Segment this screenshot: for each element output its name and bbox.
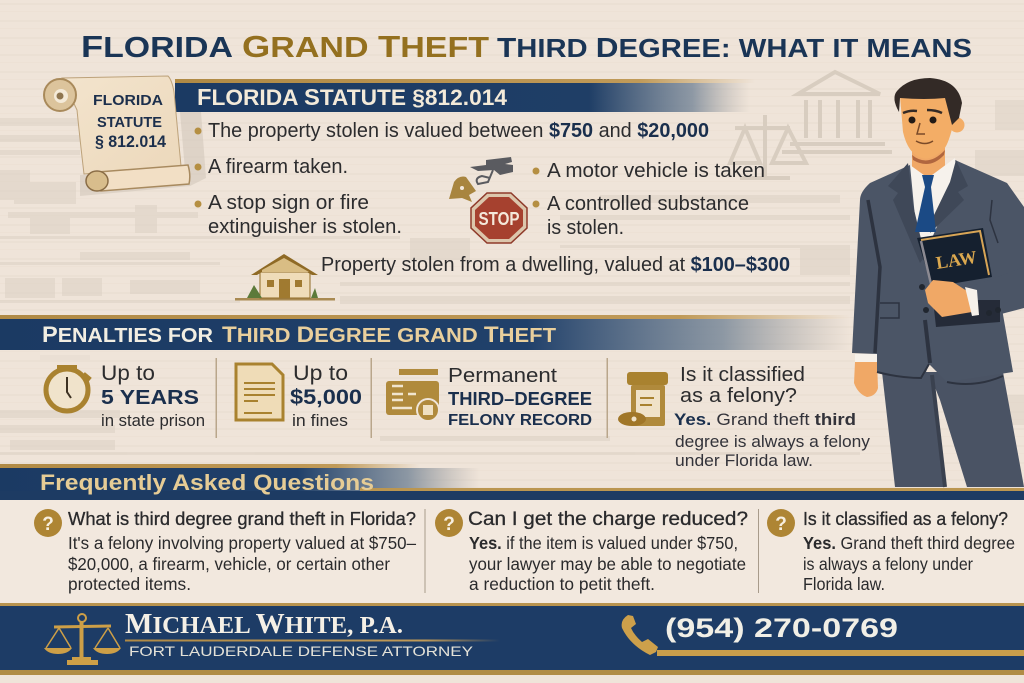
- title: THIRD DEGREE: WHAT IT MEANS: [497, 32, 972, 63]
- faq item 3: Florida law.: [803, 574, 885, 594]
- forearm: [970, 267, 1024, 320]
- footer: (954) 270-0769: [665, 613, 898, 643]
- text block: statute bullets: A firearm taken.: [208, 156, 348, 178]
- icon: stop sign: [471, 193, 527, 243]
- title: FLORIDA: [81, 29, 233, 64]
- panel: felony classification: degree is always a felony: [675, 432, 871, 451]
- text block: statute bullets: is stolen.: [547, 217, 624, 239]
- trousers: [882, 372, 1024, 487]
- panel: statute header band: [175, 79, 755, 112]
- icon: stopwatch: [46, 365, 92, 411]
- panel: statute header band: FLORIDA STATUTE §812.014: [197, 84, 508, 110]
- panel: faq header band: Frequently Asked Questions: [40, 470, 374, 495]
- panel: penalties header band: [0, 315, 850, 350]
- book lower shadow: [933, 300, 1000, 327]
- panel: felony classification: as a felony?: [680, 385, 797, 407]
- icon: scales of justice: [44, 614, 121, 665]
- faq item 2: Yes. if the item is valued under $750,: [469, 533, 738, 553]
- panel: faq body: [0, 500, 1024, 603]
- panel: 5 years penalty: Up to: [101, 362, 155, 385]
- text block: statute bullets: A motor vehicle is taken: [547, 160, 765, 182]
- panel: felony classification: Yes. Grand theft third: [674, 410, 856, 429]
- illustration: attorney holding law book: LAW: [934, 247, 978, 273]
- panel: felony record penalty: Permanent: [448, 365, 557, 387]
- icon: record card: [386, 369, 439, 421]
- faq item 1: [34, 509, 416, 594]
- icon: question 2: [435, 509, 463, 537]
- panel: penalties header band: PENALTIES FOR: [42, 322, 214, 347]
- panel: felony classification: [618, 364, 871, 470]
- faq item 1: protected items.: [68, 574, 191, 594]
- footer: [0, 603, 1024, 675]
- text block: statute bullets: [194, 120, 790, 276]
- faq item 2: Can I get the charge reduced?: [468, 509, 748, 530]
- icon: document: [236, 364, 283, 420]
- panel: 5 years penalty: in state prison: [101, 411, 205, 430]
- text block: statute bullets: A controlled substance: [547, 193, 749, 215]
- icon: telephone: [622, 615, 658, 655]
- illustration: attorney holding law book: [852, 78, 1024, 487]
- panel: felony record penalty: FELONY RECORD: [448, 412, 592, 429]
- faq item 2: your lawyer may be able to negotiate: [469, 554, 746, 574]
- title: [81, 29, 972, 64]
- icon: scroll with statute: [44, 76, 206, 196]
- book: [917, 228, 992, 287]
- sliver between body and arm: [995, 240, 1010, 275]
- text block: statute bullets: extinguisher is stolen.: [208, 216, 402, 238]
- faq item 1: It's a felony involving property valued at $750–: [68, 533, 416, 553]
- head: [950, 118, 964, 132]
- text block: statute bullets: The property stolen is valued between $750 and $20,000: [208, 120, 709, 142]
- icon: question 3: ?: [775, 514, 787, 535]
- icon: pill bottle: [618, 372, 668, 426]
- shirt: [910, 158, 957, 238]
- faq item 3: Yes. Grand theft third degree: [803, 533, 1015, 553]
- faq item 3: Is it classified as a felony?: [803, 509, 1008, 529]
- faq item 2: [435, 509, 748, 594]
- panel: felony classification: under Florida law.: [675, 451, 813, 470]
- icon: stop sign: STOP: [478, 209, 520, 229]
- icon: question 2: ?: [443, 514, 455, 535]
- title: GRAND THEFT: [242, 29, 489, 64]
- faq item 3: [767, 509, 1015, 594]
- background courthouse and scales: [730, 72, 892, 178]
- panel: fine penalty: $5,000: [290, 386, 362, 409]
- left hand: [854, 362, 878, 397]
- jacket: [852, 160, 1024, 382]
- right hand: [925, 280, 972, 317]
- panel: felony classification: Is it classified: [680, 364, 805, 386]
- icon: scroll with statute: FLORIDA: [93, 92, 163, 109]
- icon: house: [235, 254, 335, 300]
- panel: fine penalty: Up to: [293, 362, 348, 385]
- icon: question 1: [34, 509, 62, 537]
- neck: [912, 148, 945, 178]
- icon: firearm and silhouette: [449, 157, 513, 202]
- icon: scroll with statute: STATUTE: [97, 114, 162, 131]
- panel: felony record penalty: [386, 365, 592, 429]
- panel: fine penalty: [236, 362, 362, 430]
- faq item 2: a reduction to petit theft.: [469, 574, 655, 594]
- faq item 1: $20,000, a firearm, vehicle, or certain other: [68, 554, 390, 574]
- icon: scroll with statute: § 812.014: [95, 133, 167, 151]
- lapels: [888, 163, 925, 263]
- panel: 5 years penalty: 5 YEARS: [101, 387, 199, 409]
- panel: fine penalty: in fines: [292, 411, 348, 430]
- faq item 1: What is third degree grand theft in Florida?: [68, 509, 416, 529]
- icon: question 3: [767, 509, 795, 537]
- panel: faq header band: [0, 464, 1024, 500]
- faq item 3: is always a felony under: [803, 554, 973, 574]
- footer: MICHAEL WHITE, P.A.: [125, 609, 403, 640]
- panel: felony record penalty: THIRD–DEGREE: [448, 389, 592, 409]
- icon: question 1: ?: [42, 514, 54, 535]
- text block: statute bullets: Property stolen from a dwelling, valued at $100–$300: [321, 254, 790, 276]
- tie: [915, 175, 936, 232]
- text block: statute bullets: A stop sign or fire: [208, 192, 369, 214]
- footer: FORT LAUDERDALE DEFENSE ATTORNEY: [129, 643, 474, 659]
- panel: penalties header band: THIRD DEGREE GRAND THEFT: [222, 322, 556, 347]
- panel: 5 years penalty: [46, 362, 205, 430]
